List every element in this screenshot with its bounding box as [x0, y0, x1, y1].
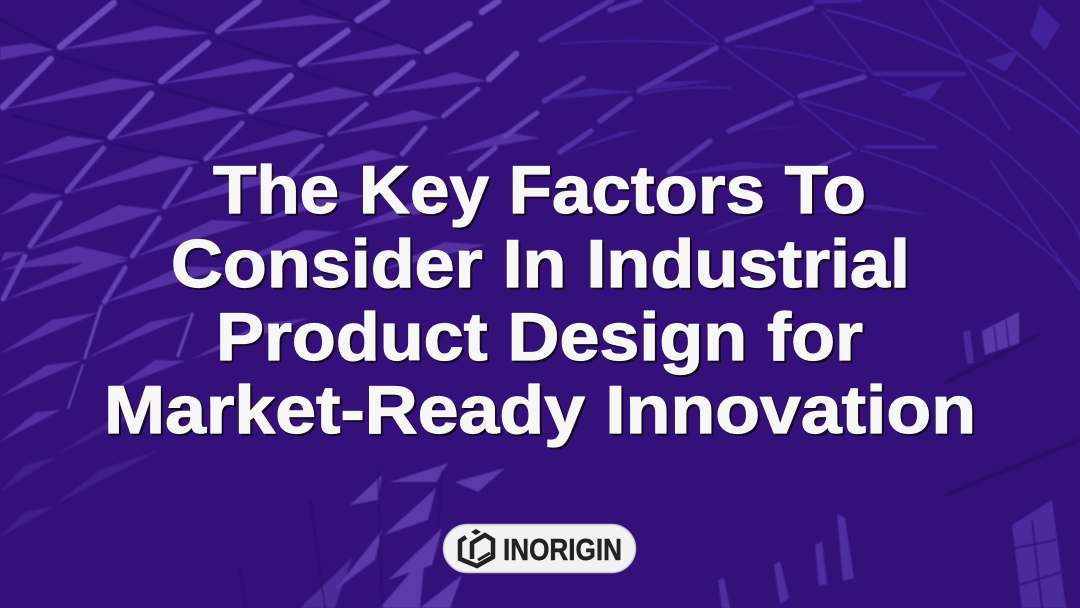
- wordmark: INORIGIN: [503, 532, 622, 567]
- logo pill: [444, 524, 636, 572]
- title: Product Design for: [216, 299, 863, 375]
- title: Consider In Industrial: [171, 226, 910, 302]
- icon: hexagonal cube mark: [460, 529, 493, 566]
- title: [104, 152, 976, 448]
- background: lattice roof, left side: [0, 0, 540, 442]
- logo badge: [444, 524, 636, 572]
- background: narrow window slits: [718, 514, 854, 608]
- background: lattice fan near logo: [240, 463, 505, 608]
- background: lattice roof, faint lower left: [0, 400, 170, 537]
- title: Market-Ready Innovation: [104, 372, 976, 448]
- background: lower right tall window: [1012, 500, 1066, 608]
- background: lattice roof, right side: [541, 0, 1080, 290]
- background: upper right window: [945, 312, 1080, 495]
- title: The Key Factors To: [213, 152, 866, 228]
